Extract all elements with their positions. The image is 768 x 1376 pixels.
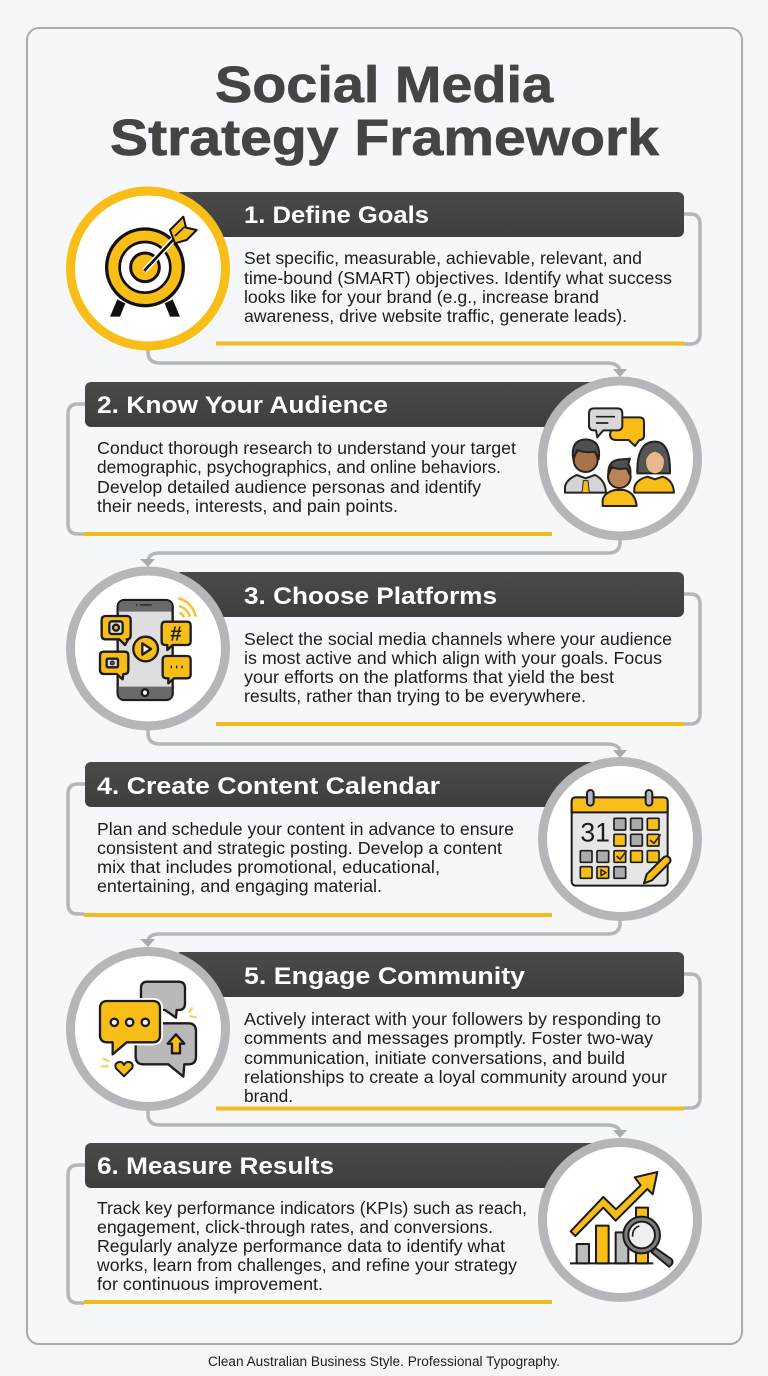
text: choose platforms body: is most active and which align with your goals. Focus (244, 648, 662, 668)
panel: step 5 engage community (175, 952, 700, 1110)
text: create content calendar body: Plan and schedule your content in advance to ensure (97, 819, 514, 839)
title (110, 56, 660, 166)
arrow: step 2 to 3 (140, 538, 620, 567)
circle: step 5 (70, 952, 226, 1106)
text: engage community body: comments and messages promptly. Foster two-way (244, 1028, 653, 1048)
panel: step 2 know your audience (68, 382, 605, 536)
text: choose platforms body (244, 629, 672, 706)
arrow: step 5 to 6 (148, 1108, 627, 1138)
text: measure results body: engagement, click-through rates, and conversions. (97, 1217, 493, 1237)
text: create content calendar body: consistent and strategic posting. Develop a content (97, 838, 502, 858)
text: know your audience body: Conduct thorough research to understand your target (97, 438, 516, 458)
text: choose platforms body: results, rather than trying to be everywhere. (244, 686, 586, 706)
text: define goals body: time-bound (SMART) objectives. Identify what success (244, 268, 672, 288)
text: know your audience body (97, 438, 516, 516)
text: measure results body: works, learn from challenges, and refine your strategy (96, 1255, 517, 1275)
text: engage community body: relationships to create a loyal community around your (244, 1067, 667, 1087)
text: define goals body (244, 248, 672, 326)
footer caption: Clean Australian Business Style. Professional Typography. (208, 1354, 560, 1369)
text: know your audience body: demographic, psychographics, and online behaviors. (97, 457, 501, 477)
text: engage community body: brand. (244, 1086, 293, 1106)
text: define goals body: Set specific, measurable, achievable, relevant, and (244, 248, 642, 268)
text: measure results body (96, 1198, 527, 1294)
text: create content calendar body: mix that includes promotional, educational, (97, 857, 440, 877)
arrow: step 1 to 2 (148, 348, 627, 377)
text: engage community body (244, 1009, 667, 1106)
panel: step 1 define goals (175, 192, 700, 346)
text: know your audience body: Develop detailed audience personas and identify (97, 477, 481, 497)
circle: step 6 (542, 1142, 698, 1298)
text: engage community body: communication, initiate conversations, and build (244, 1048, 625, 1068)
text: define goals body: looks like for your brand (e.g., increase brand (244, 287, 599, 307)
icon: content calendar (572, 790, 671, 886)
text: choose platforms body: Select the social media channels where your audience (244, 629, 672, 649)
text: engage community body: Actively interact with your followers by responding to (244, 1009, 661, 1029)
panel: step 6 measure results (68, 1143, 605, 1304)
icon: content calendar: 31 (580, 818, 610, 848)
circle: step 1 (70, 191, 226, 346)
panel: step 4 create content calendar (68, 762, 605, 917)
text: choose platforms body: your efforts on the platforms that yield the best (244, 667, 614, 687)
text: know your audience body: their needs, interests, and pain points. (97, 496, 398, 516)
text: define goals body: awareness, drive website traffic, generate leads). (244, 306, 627, 326)
title: Strategy Framework (110, 109, 660, 166)
text: measure results body: Regularly analyze performance data to identify what (97, 1236, 505, 1256)
heading: engage community: 5. Engage Community (244, 963, 525, 990)
circle: step 2 (542, 381, 698, 536)
icon: growth chart with magnifier (570, 1172, 673, 1267)
circle: step 4 (542, 762, 698, 916)
text: create content calendar body: entertaining, and engaging material. (97, 876, 382, 896)
heading: measure results: 6. Measure Results (97, 1153, 334, 1180)
heading: know your audience: 2. Know Your Audience (97, 392, 388, 419)
heading: choose platforms: 3. Choose Platforms (244, 583, 497, 610)
arrow: step 3 to 4 (148, 728, 627, 758)
icon: smartphone with social bubbles: # (170, 623, 182, 646)
icon: smartphone with social bubbles (100, 598, 196, 700)
text: measure results body: Track key performance indicators (KPIs) such as reach, (97, 1198, 527, 1218)
circle: step 3 (70, 571, 226, 726)
icon: target with arrow (107, 217, 197, 317)
arrow: step 4 to 5 (140, 918, 620, 947)
text: create content calendar body (97, 819, 514, 896)
panel: step 3 choose platforms (175, 572, 700, 726)
icon: audience group (565, 408, 674, 506)
icon: chat bubbles (100, 982, 197, 1077)
title: Social Media (215, 56, 554, 113)
heading: create content calendar: 4. Create Content Calendar (97, 773, 440, 800)
heading: define goals: 1. Define Goals (244, 202, 429, 229)
text: measure results body: for continuous improvement. (97, 1274, 323, 1294)
